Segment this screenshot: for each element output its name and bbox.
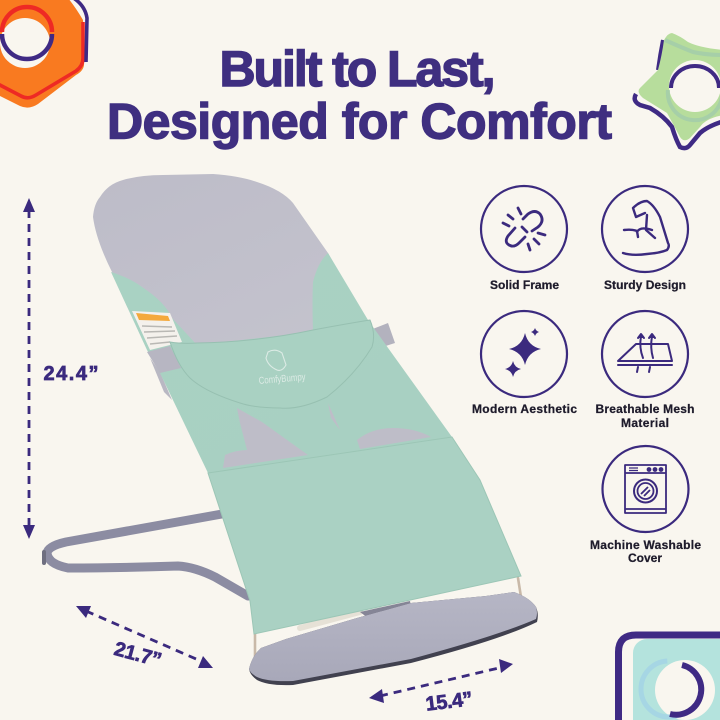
label: Breathable Mesh [596, 402, 694, 416]
side strap right [370, 323, 395, 350]
warning label [132, 311, 182, 350]
icon: washing machine [625, 465, 666, 513]
icon: sparkles [505, 328, 541, 377]
label: Sturdy Design [604, 278, 686, 292]
green fabric seat [111, 253, 521, 634]
label: Machine Washable [590, 538, 701, 552]
depth dimension: 15.4 inches [369, 659, 513, 716]
label: Cover [628, 551, 662, 565]
product: baby bouncer [44, 174, 538, 685]
brand logo: ComfyBumpy [258, 372, 306, 387]
pocket panel [208, 437, 521, 634]
icon: mesh layers with airflow arrows [618, 334, 672, 372]
brand logo [258, 350, 306, 387]
feature: modern aesthetic [472, 311, 577, 416]
label [590, 538, 701, 565]
width dimension: 21.7 inches [76, 606, 213, 672]
depth dimension: 15.4 inches: 15.4” [424, 688, 474, 716]
decorative shape: teal square bottom right [618, 635, 720, 720]
feature: breathable mesh material [596, 311, 694, 430]
side strap left [147, 346, 181, 373]
label: Modern Aesthetic [472, 402, 577, 416]
label: Material [621, 416, 669, 430]
label: Solid Frame [490, 278, 559, 292]
side strap sliver [150, 358, 172, 400]
lower mesh windows [223, 408, 308, 468]
wire frame [44, 514, 521, 662]
decorative shape: orange nut top left [0, 0, 87, 108]
icon: broken chain link [503, 208, 545, 250]
mesh back [93, 174, 420, 470]
feature: sturdy design [602, 186, 688, 292]
icon: flexed arm [623, 201, 669, 255]
width dimension: 21.7 inches: 21.7” [112, 638, 164, 672]
title: Built to Last, [220, 41, 496, 97]
height dimension: 24.4 inches [23, 198, 98, 539]
title: Designed for Comfort [107, 94, 612, 150]
padded headrest band [170, 320, 374, 408]
title [107, 41, 612, 150]
folding mechanism [360, 601, 411, 618]
decorative shape: green star top right [635, 33, 720, 148]
plastic base [249, 592, 538, 685]
feature: solid frame [481, 186, 567, 292]
feature: machine washable cover [590, 446, 701, 565]
label [596, 402, 694, 430]
height dimension: 24.4 inches: 24.4” [44, 363, 98, 385]
